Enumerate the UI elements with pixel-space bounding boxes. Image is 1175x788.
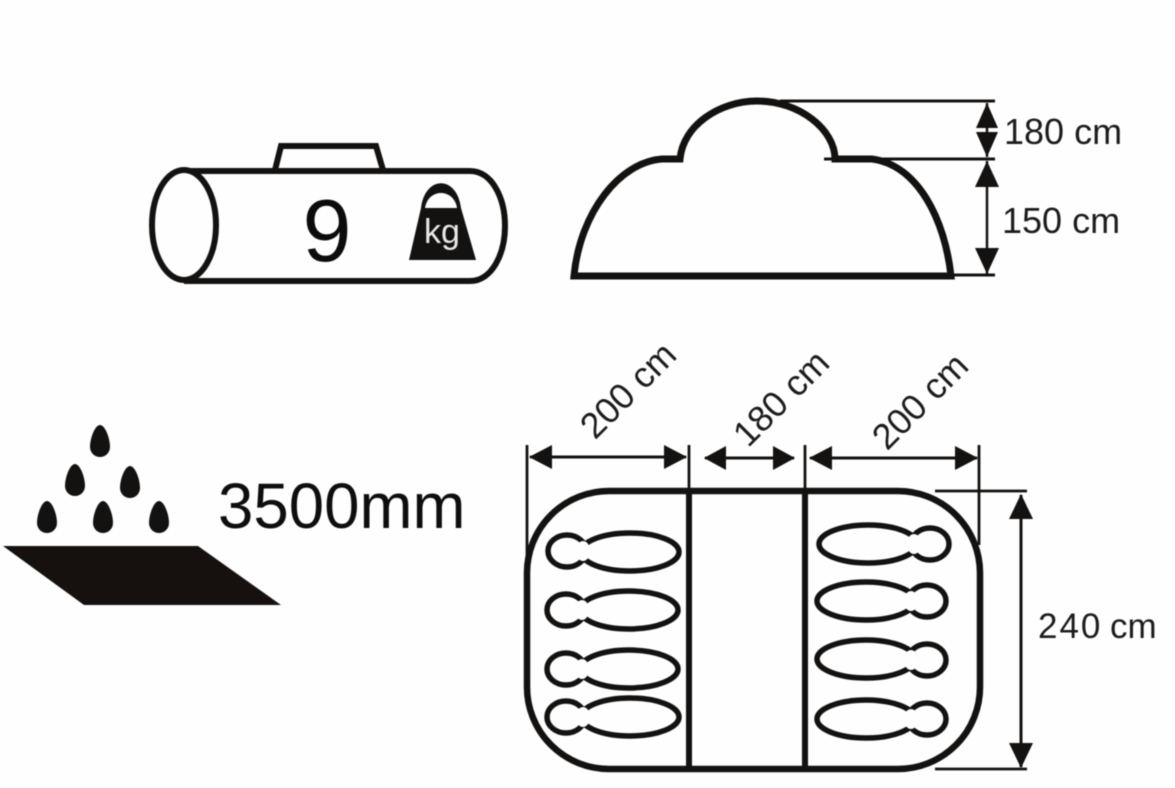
icon: kg weight: kg <box>424 213 460 251</box>
tent outline <box>574 101 951 276</box>
room dividers <box>689 491 805 769</box>
arrow: left room width <box>529 445 687 469</box>
panel: tent side view <box>574 101 1122 276</box>
label: 3500mm: 3500mm <box>218 471 465 542</box>
weight value: 9 <box>303 181 351 280</box>
panel: floor plan <box>527 334 1157 769</box>
icon: bag body <box>184 171 505 281</box>
arrow: right room width <box>809 446 978 470</box>
arrow: depth <box>1009 494 1033 768</box>
label: 180 cm middle: 180 cm <box>725 342 837 454</box>
icon: bag handle <box>275 146 383 170</box>
panel: waterproof rating <box>3 425 465 605</box>
label: 150 cm: 150 cm <box>1002 200 1120 241</box>
floor outline <box>527 491 980 769</box>
panel: carry bag weight <box>152 146 505 281</box>
label: 180 cm: 180 cm <box>1004 111 1122 152</box>
icon: bag end <box>152 170 216 280</box>
dimension guide lines <box>527 445 1027 769</box>
arrow: middle room width <box>704 446 795 470</box>
icon: ground sheet <box>3 546 281 605</box>
sleeping bags: left room <box>547 533 679 736</box>
sleeping bags: right room <box>817 525 949 738</box>
icon: kg weight <box>409 183 476 260</box>
label: 200 cm left: 200 cm <box>572 334 684 446</box>
arrow: lower height <box>975 161 999 274</box>
height guide lines <box>780 101 995 275</box>
icon: rain drops <box>37 425 169 533</box>
label: 200 cm right: 200 cm <box>864 345 976 457</box>
arrow: upper height <box>976 103 998 157</box>
label: 240 cm: cm <box>1110 607 1157 646</box>
label: 240 cm: 240 <box>1038 607 1102 646</box>
